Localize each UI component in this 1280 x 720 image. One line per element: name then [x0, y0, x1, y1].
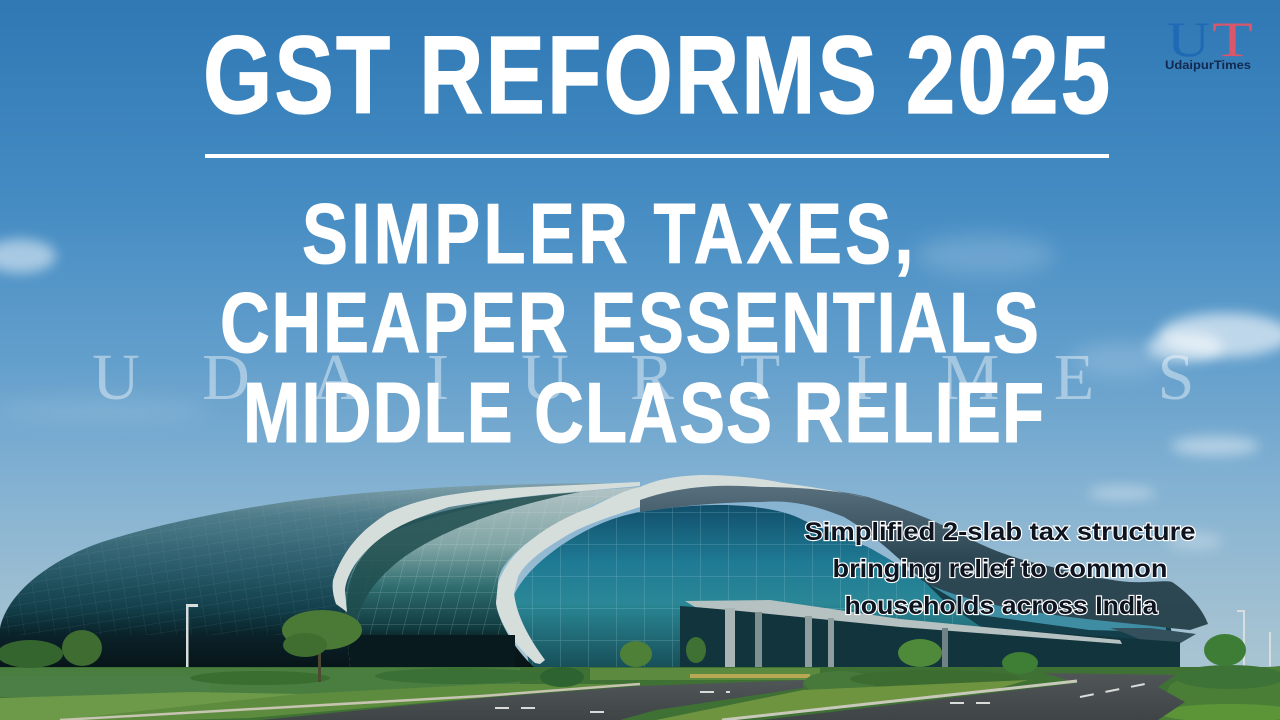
subtitle: SIMPLER TAXES,	[302, 187, 914, 282]
landscaping and lawns	[0, 665, 1280, 720]
clouds	[0, 235, 1280, 550]
watermark: I	[427, 341, 449, 414]
watermark: I	[851, 341, 873, 414]
caption: households across India	[844, 592, 1159, 620]
watermark: R	[630, 341, 674, 414]
main curved glass facade	[514, 505, 1000, 668]
watermark: U	[521, 341, 569, 414]
watermark: A	[312, 341, 360, 414]
logo	[1165, 11, 1253, 72]
caption: Simplified 2-slab tax structure	[804, 518, 1196, 546]
logo: UdaipurTimes	[1165, 58, 1251, 72]
airport terminal building	[0, 475, 1208, 668]
white roof arcs	[333, 475, 868, 664]
middle wing glass roof	[345, 487, 640, 668]
caption: bringing relief to common	[832, 555, 1168, 583]
logo: U	[1167, 11, 1210, 67]
left dome glass roof	[0, 483, 640, 668]
watermark: D	[202, 341, 250, 414]
title divider	[205, 154, 1109, 158]
title: GST REFORMS 2025	[203, 14, 1110, 137]
watermark: U	[92, 341, 140, 414]
subtitle: CHEAPER ESSENTIALS	[220, 276, 1039, 371]
watermark: M	[941, 341, 999, 414]
right wing and wave roof	[640, 485, 1208, 668]
watermark	[92, 341, 1194, 414]
trees	[0, 610, 1246, 682]
caption	[804, 518, 1196, 620]
lamp posts	[186, 604, 1271, 673]
logo: T	[1212, 11, 1253, 67]
subtitle	[220, 187, 1044, 461]
ground floor and canopy	[350, 600, 1180, 668]
subtitle: MIDDLE CLASS RELIEF	[243, 366, 1044, 461]
watermark: T	[740, 341, 780, 414]
watermark: S	[1158, 341, 1194, 414]
watermark: E	[1054, 341, 1094, 414]
roads	[60, 673, 1185, 720]
